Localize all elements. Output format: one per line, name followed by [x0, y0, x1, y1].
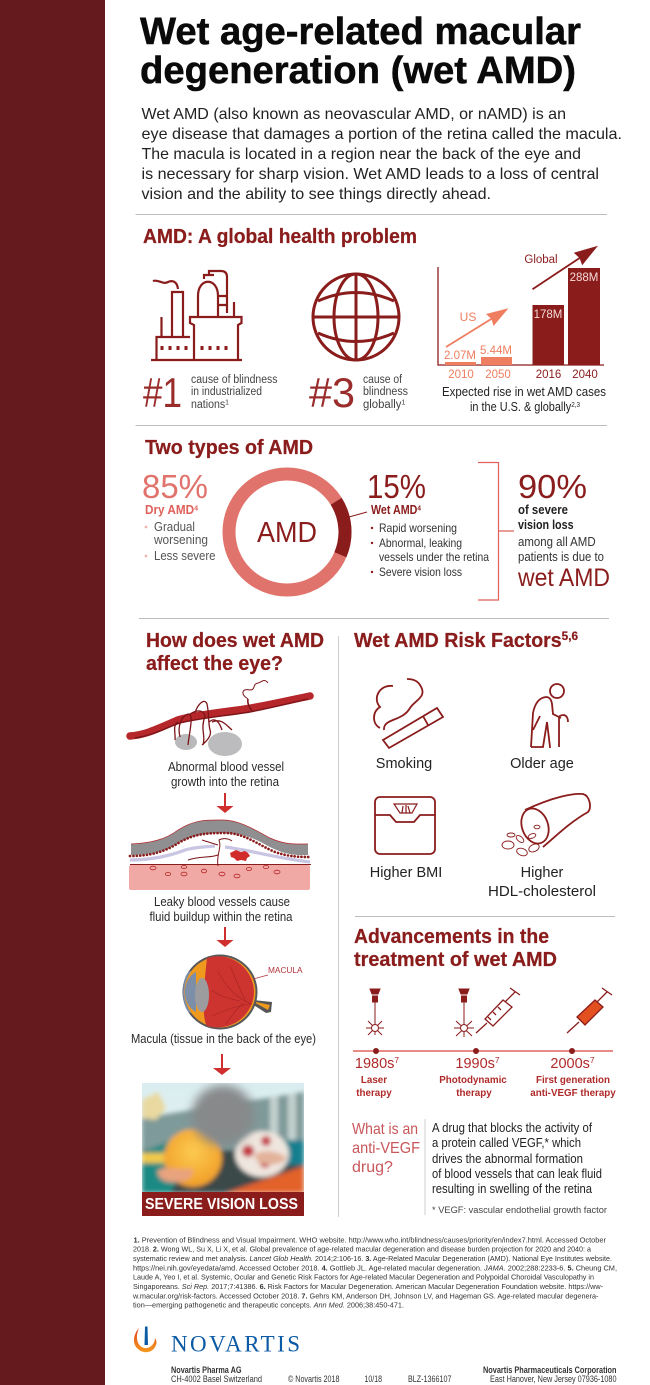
- stat: 90 percent: among all AMD: [518, 535, 596, 549]
- footer: addresses: BLZ-1366107: [408, 1374, 452, 1384]
- timeline: 7: [495, 1055, 500, 1065]
- timeline: therapy: [356, 1088, 392, 1099]
- label: higher HDL: Higher: [521, 865, 564, 881]
- heading: two types: Two types of AMD: [145, 437, 313, 459]
- text: #3 cause: 1: [401, 398, 406, 406]
- footer: addresses: [171, 1365, 616, 1384]
- intro text: Wet AMD (also known as neovascular AMD, or nAMD) is an: [142, 106, 566, 123]
- timeline: 1990s: [455, 1056, 495, 1072]
- text: #3 cause: cause of: [363, 374, 403, 386]
- bar chart: expected rise: Global: [524, 254, 558, 266]
- stat: dry AMD: 85%: [142, 468, 208, 505]
- references: Laude A, Yeo I, et al. Systemic, Ocular and Genetic Risk Factors for Age-related Macular Degeneration and Polypoidal Choroidal Vasculopathy in: [133, 1273, 594, 1282]
- label: smoking: Smoking: [376, 756, 432, 772]
- caption: leaky vessels: [150, 894, 293, 924]
- timeline: First generation: [536, 1075, 610, 1086]
- heading: risk factors: Wet AMD Risk Factors: [354, 630, 566, 652]
- text: #1 cause: [143, 369, 278, 416]
- timeline: 2000s: [550, 1056, 590, 1072]
- panel: advancements in treatment: [352, 926, 616, 1216]
- text: #1 cause: in industrialized: [191, 386, 262, 398]
- icon: globe: [313, 274, 399, 360]
- arrow: US: [446, 308, 508, 347]
- title: degeneration (wet AMD): [140, 50, 576, 92]
- arrow: [216, 927, 234, 947]
- panel: global health problem: [143, 226, 606, 416]
- references: 1. Prevention of Blindness and Visual Impairment. WHO website. http://www.who.int/blindness/causes/priority/en/index7.html. Accessed October: [134, 1235, 606, 1244]
- stat: dry AMD: Dry AMD: [145, 503, 197, 517]
- bar chart: expected rise: [438, 246, 606, 414]
- footer: addresses: Novartis Pharmaceuticals Corporation: [483, 1365, 616, 1375]
- stat: dry AMD: worsening: [153, 533, 208, 547]
- stat: wet AMD: Severe vision loss: [379, 565, 462, 579]
- icon: factory: [151, 271, 242, 360]
- caption: macula: Macula (tissue in the back of the eye): [131, 1031, 316, 1046]
- label: older age: Older age: [510, 756, 574, 772]
- heading: how does: affect the eye?: [146, 653, 283, 675]
- timeline: Photodynamic: [439, 1075, 507, 1086]
- arrow: [216, 793, 234, 813]
- footer: addresses: East Hanover, New Jersey 07936-1080: [490, 1374, 616, 1384]
- callout: what is anti-VEGF: drives the abnormal formation: [432, 1152, 583, 1166]
- stat: wet AMD: Wet AMD: [371, 503, 425, 517]
- icon: older person: [531, 684, 568, 747]
- caption: abnormal growth: growth into the retina: [171, 774, 280, 789]
- illustration: eye: MACULA: [268, 965, 303, 975]
- bar chart: expected rise: 5.44M: [480, 345, 512, 357]
- bar chart: expected rise: 2016: [536, 369, 561, 381]
- logo: Novartis: NOVARTIS: [171, 1332, 300, 1356]
- callout: what is anti-VEGF: drug?: [352, 1159, 393, 1176]
- label: higher HDL: HDL-cholesterol: [488, 884, 596, 900]
- stat: wet AMD: 4: [417, 504, 422, 512]
- text: #3 cause: #3: [309, 369, 355, 416]
- timeline: 7: [590, 1055, 595, 1065]
- photo: simulated vision loss: [142, 1083, 304, 1216]
- illustration: blood vessel: [130, 681, 310, 756]
- references: 2018. 2. Wong WL, Su X, Li X, et al. Global prevalence of age-related macular degeneration and disease burden projection for 2020 and 2040: a: [133, 1245, 592, 1254]
- references: https://nei.nih.gov/eyedata/amd. Accessed October 2018. 4. Gottlieb JL. Age-related macular degeneration. JAMA. 2002;288:2233-6. 5. Cheung CM,: [133, 1263, 617, 1272]
- heading: global health: AMD: A global health problem: [143, 226, 417, 248]
- timeline: therapy: [456, 1088, 492, 1099]
- intro text: is necessary for sharp vision. Wet AMD leads to a loss of central: [142, 166, 599, 183]
- panel: risk factors: [354, 629, 596, 900]
- icon: laser 1980s: [366, 989, 384, 1035]
- donut chart: [229, 474, 367, 590]
- callout: what is anti-VEGF: a protein called VEGF,* which: [432, 1136, 581, 1150]
- stat: wet AMD: Abnormal, leaking: [379, 536, 462, 550]
- heading: advancements: [354, 926, 557, 971]
- icon: blood vessel with cells: [502, 794, 590, 857]
- title: [140, 11, 581, 92]
- stat: 90 percent: wet AMD: [517, 564, 610, 592]
- bar chart: expected rise: 2010: [448, 369, 474, 381]
- illustration: retina cross-section: [129, 820, 311, 890]
- bar chart: expected rise: 2040: [572, 369, 598, 381]
- arrow: [213, 1054, 231, 1075]
- arrow: Global: [532, 246, 598, 289]
- references: w.macular.org/risk-factors. Accessed October 2018. 7. Gehrs KM, Anderson DH, Johnson LV, and Hageman GS. Age-related macular degenera-: [132, 1291, 599, 1300]
- caption: leaky vessels: Leaky blood vessels cause: [154, 894, 290, 909]
- icon: scale: [375, 797, 435, 854]
- stat: 90 percent: [517, 468, 610, 592]
- callout: what is anti-VEGF: [352, 1119, 607, 1216]
- sidebar: [0, 0, 105, 1385]
- label: higher BMI: Higher BMI: [370, 865, 442, 881]
- timeline: [353, 1048, 616, 1099]
- text: #3 cause: blindness: [363, 386, 408, 398]
- caption: leaky vessels: fluid buildup within the retina: [150, 909, 293, 924]
- bar chart: expected rise: 2.07M: [444, 350, 476, 362]
- text: #1 cause: 1: [225, 398, 229, 406]
- icon: smoking: [374, 679, 443, 748]
- text: #1 cause: nations: [191, 399, 228, 411]
- intro text: eye disease that damages a portion of the retina called the macula.: [142, 126, 622, 143]
- chart caption: Expected rise in wet AMD cases: [442, 384, 606, 399]
- text: #3 cause: [309, 369, 408, 416]
- heading: risk factors: 5,6: [562, 629, 578, 643]
- bar chart: expected rise: US: [460, 310, 476, 324]
- logo: Novartis: [134, 1326, 300, 1356]
- label: higher HDL: [488, 865, 596, 900]
- icon: syringe filled: [567, 988, 612, 1033]
- footer: addresses: 10/18: [364, 1374, 382, 1384]
- panel: two types of AMD: [142, 437, 610, 600]
- text: #1 cause: #1: [143, 369, 182, 416]
- heading: advancements: treatment of wet AMD: [354, 949, 557, 971]
- caption: abnormal growth: Abnormal blood vessel: [168, 759, 284, 774]
- bar chart: expected rise: 2050: [485, 369, 511, 381]
- icon: syringe outline: [476, 988, 520, 1033]
- donut chart: AMD: [257, 517, 317, 549]
- timeline: 7: [394, 1055, 399, 1065]
- bracket: [478, 462, 514, 600]
- heading: how does: How does wet AMD: [146, 630, 324, 652]
- stat: dry AMD: Gradual: [154, 520, 195, 534]
- bar chart: expected rise: 288M: [570, 272, 598, 284]
- references: [132, 1235, 617, 1310]
- footer: addresses: Novartis Pharma AG: [171, 1365, 242, 1375]
- heading: how does: [146, 630, 324, 675]
- heading: advancements: Advancements in the: [354, 926, 549, 948]
- intro text: [142, 106, 622, 203]
- caption: abnormal growth: [168, 759, 284, 789]
- stat: 90 percent: 90%: [518, 468, 587, 505]
- callout: what is anti-VEGF: resulting in swelling of the retina: [432, 1182, 592, 1196]
- stat: dry AMD: 4: [194, 504, 199, 512]
- chart caption: 2,3: [571, 400, 580, 409]
- stat: wet AMD: [367, 468, 489, 579]
- stat: wet AMD: vessels under the retina: [379, 550, 489, 564]
- callout: what is anti-VEGF: A drug that blocks the activity of: [432, 1121, 592, 1135]
- intro text: The macula is located in a region near the back of the eye and: [142, 146, 581, 163]
- intro text: vision and the ability to see things directly ahead.: [142, 186, 491, 203]
- stat: wet AMD: 15%: [367, 468, 426, 505]
- references: Singaporeans. Sci Rep. 2017;7:41386. 6. Risk Factors for Macular Degeneration. American Macular Degeneration Foundation website. https://ww-: [133, 1282, 603, 1291]
- chart caption: in the U.S. & globally: [470, 399, 591, 414]
- footer: addresses: CH-4002 Basel Switzerland: [171, 1374, 262, 1384]
- stat: 90 percent: vision loss: [518, 518, 574, 532]
- footer: addresses: © Novartis 2018: [288, 1374, 340, 1384]
- references: systematic review and met analysis. Lancet Glob Health. 2014;2:106-16. 3. Age-Related Macular Degeneration (AMD). National Eye Institutes website.: [133, 1254, 612, 1263]
- title: Wet age-related macular: [140, 11, 581, 53]
- references: tion—emerging pathogenetic and therapeutic concepts. Ann Med. 2006;38:450-471.: [133, 1301, 404, 1310]
- chart caption: [442, 384, 606, 414]
- callout: what is anti-VEGF: of blood vessels that can leak fluid: [432, 1167, 602, 1181]
- callout: what is anti-VEGF: * VEGF: vascular endothelial growth factor: [432, 1205, 607, 1216]
- timeline: anti-VEGF therapy: [530, 1088, 616, 1099]
- panel: how wet AMD affects the eye: [129, 630, 324, 1216]
- stat: wet AMD: Rapid worsening: [379, 521, 457, 535]
- stat: 90 percent: patients is due to: [518, 550, 604, 564]
- callout: what is anti-VEGF: anti-VEGF: [352, 1140, 420, 1157]
- timeline: Laser: [361, 1075, 387, 1086]
- photo: simulated vision loss: SEVERE VISION LOSS: [145, 1196, 298, 1213]
- illustration: eye: [182, 954, 303, 1030]
- timeline: 1980s: [355, 1056, 394, 1072]
- stat: dry AMD: Less severe: [154, 549, 216, 563]
- text: #3 cause: globally: [363, 399, 402, 411]
- callout: what is anti-VEGF: What is an: [352, 1121, 418, 1138]
- stat: dry AMD: [142, 468, 216, 563]
- text: #1 cause: cause of blindness: [191, 374, 278, 386]
- stat: 90 percent: of severe: [518, 503, 568, 517]
- icon: laser 1990s: [454, 989, 474, 1037]
- bar chart: expected rise: 178M: [534, 309, 562, 321]
